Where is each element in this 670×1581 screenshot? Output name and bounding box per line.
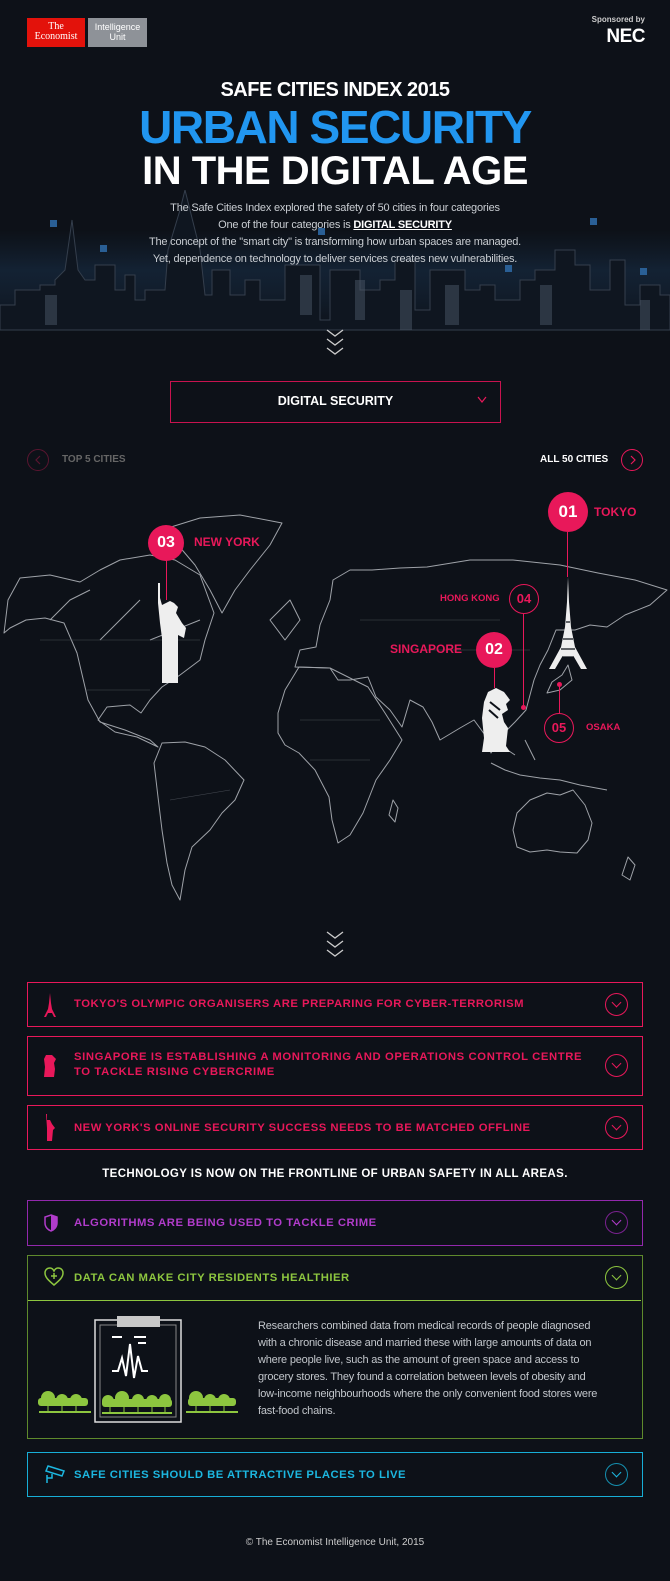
nav: top 5 cities xyxy=(27,449,126,471)
panel: tokyo story xyxy=(27,982,643,1027)
text block: health research xyxy=(258,1320,597,1417)
map marker: 03 new york: 03 xyxy=(157,534,175,551)
panel: attractive places xyxy=(27,1452,643,1497)
intro text xyxy=(149,202,521,265)
logo: economist intelligence unit: Intelligence xyxy=(95,22,140,32)
map marker: 04 hong kong: 04 xyxy=(517,591,531,606)
intro text: The concept of the "smart city" is transforming how urban spaces are managed. xyxy=(149,236,521,248)
panel: data healthier (expanded): DATA CAN MAKE CITY RESIDENTS HEALTHIER xyxy=(74,1272,350,1284)
icon: heart plus xyxy=(44,1267,64,1286)
map marker: 03 new york: NEW YORK xyxy=(194,535,260,549)
nav: all 50 cities xyxy=(540,449,643,471)
dropdown: digital security xyxy=(170,381,501,423)
map marker: 04 hong kong xyxy=(440,584,539,710)
title: URBAN SECURITY xyxy=(139,101,531,153)
title xyxy=(139,79,532,193)
nav: all 50 cities: ALL 50 CITIES xyxy=(540,454,608,465)
logo: economist intelligence unit: Unit xyxy=(109,32,126,42)
icon: merlion small xyxy=(44,1055,56,1077)
title: SAFE CITIES INDEX 2015 xyxy=(220,79,450,101)
icon: cctv camera xyxy=(45,1465,65,1483)
text block: health research: fast-food chains. xyxy=(258,1405,335,1417)
text block: health research: Researchers combined data from medical records of people diagnosed xyxy=(258,1320,590,1332)
panel: singapore story: SINGAPORE IS ESTABLISHING A MONITORING AND OPERATIONS CONTROL CENTRE xyxy=(74,1051,582,1063)
panel: attractive places: SAFE CITIES SHOULD BE ATTRACTIVE PLACES TO LIVE xyxy=(74,1469,406,1481)
text block: health research: grocery stores. They found a correlation between levels of obesity and xyxy=(258,1371,586,1383)
map marker: 05 osaka: 05 xyxy=(552,720,566,735)
logo: economist intelligence unit xyxy=(27,18,147,47)
dropdown: digital security: DIGITAL SECURITY xyxy=(278,394,393,408)
text block: health research: with a chronic disease and married these with large amounts of data on xyxy=(258,1337,591,1349)
icon: shield xyxy=(44,1214,58,1232)
panel: tokyo story: TOKYO'S OLYMPIC ORGANISERS ARE PREPARING FOR CYBER-TERRORISM xyxy=(74,998,524,1010)
arrow: scroll chevrons 2 xyxy=(326,932,344,957)
sponsor: NEC: Sponsored by xyxy=(592,15,645,24)
panel: algorithms xyxy=(27,1200,643,1246)
map marker: 03 new york xyxy=(148,525,260,683)
text block: health research: low-income neighbourhoods where the only convenient food stores were xyxy=(258,1388,597,1400)
panel: singapore story: TO TACKLE RISING CYBERCRIME xyxy=(74,1066,275,1078)
icon: statue small xyxy=(46,1114,55,1141)
map marker: 02 singapore: SINGAPORE xyxy=(390,642,462,656)
icon: statue of liberty xyxy=(158,583,186,683)
intro text: Yet, dependence on technology to deliver services creates new vulnerabilities. xyxy=(153,253,517,265)
icon: merlion xyxy=(482,688,510,752)
map marker: 05 osaka: OSAKA xyxy=(586,722,620,733)
skyline background xyxy=(0,190,670,330)
sponsor: NEC: NEC xyxy=(606,26,645,47)
text block: health research: where people live, such as the amount of green space and access to xyxy=(258,1354,579,1366)
map marker: 02 singapore xyxy=(390,632,512,752)
arrow: scroll chevrons xyxy=(326,330,344,355)
logo: economist intelligence unit: The xyxy=(48,21,64,32)
map marker: 02 singapore: 02 xyxy=(485,641,503,658)
logo: economist intelligence unit: Economist xyxy=(35,31,77,42)
intro text: The Safe Cities Index explored the safety of 50 cities in four categories xyxy=(170,202,500,214)
footer: © The Economist Intelligence Unit, 2015 xyxy=(246,1537,424,1548)
world map xyxy=(4,514,668,900)
panel: algorithms: ALGORITHMS ARE BEING USED TO TACKLE CRIME xyxy=(74,1217,377,1229)
icon: tokyo tower small xyxy=(44,993,56,1017)
illustration: clipboard with heartbeat and trees xyxy=(38,1316,238,1423)
nav: top 5 cities: TOP 5 CITIES xyxy=(62,454,126,465)
panel: data healthier (expanded) xyxy=(27,1255,643,1439)
panel: singapore story xyxy=(27,1036,643,1096)
panel: new york story: NEW YORK'S ONLINE SECURITY SUCCESS NEEDS TO BE MATCHED OFFLINE xyxy=(74,1122,531,1134)
map marker: 01 tokyo: TOKYO xyxy=(594,505,636,519)
sponsor: NEC xyxy=(592,15,645,47)
intro text: One of the four categories is DIGITAL SECURITY xyxy=(218,219,452,231)
map marker: 05 osaka xyxy=(544,682,620,743)
heading: technology frontline: TECHNOLOGY IS NOW ON THE FRONTLINE OF URBAN SAFETY IN ALL AREAS. xyxy=(102,1168,568,1180)
map marker: 04 hong kong: HONG KONG xyxy=(440,593,500,604)
title: IN THE DIGITAL AGE xyxy=(142,149,528,193)
map marker: 01 tokyo xyxy=(548,492,636,669)
panel: new york story xyxy=(27,1105,643,1150)
map marker: 01 tokyo: 01 xyxy=(559,502,577,521)
icon: tokyo tower xyxy=(549,578,587,669)
